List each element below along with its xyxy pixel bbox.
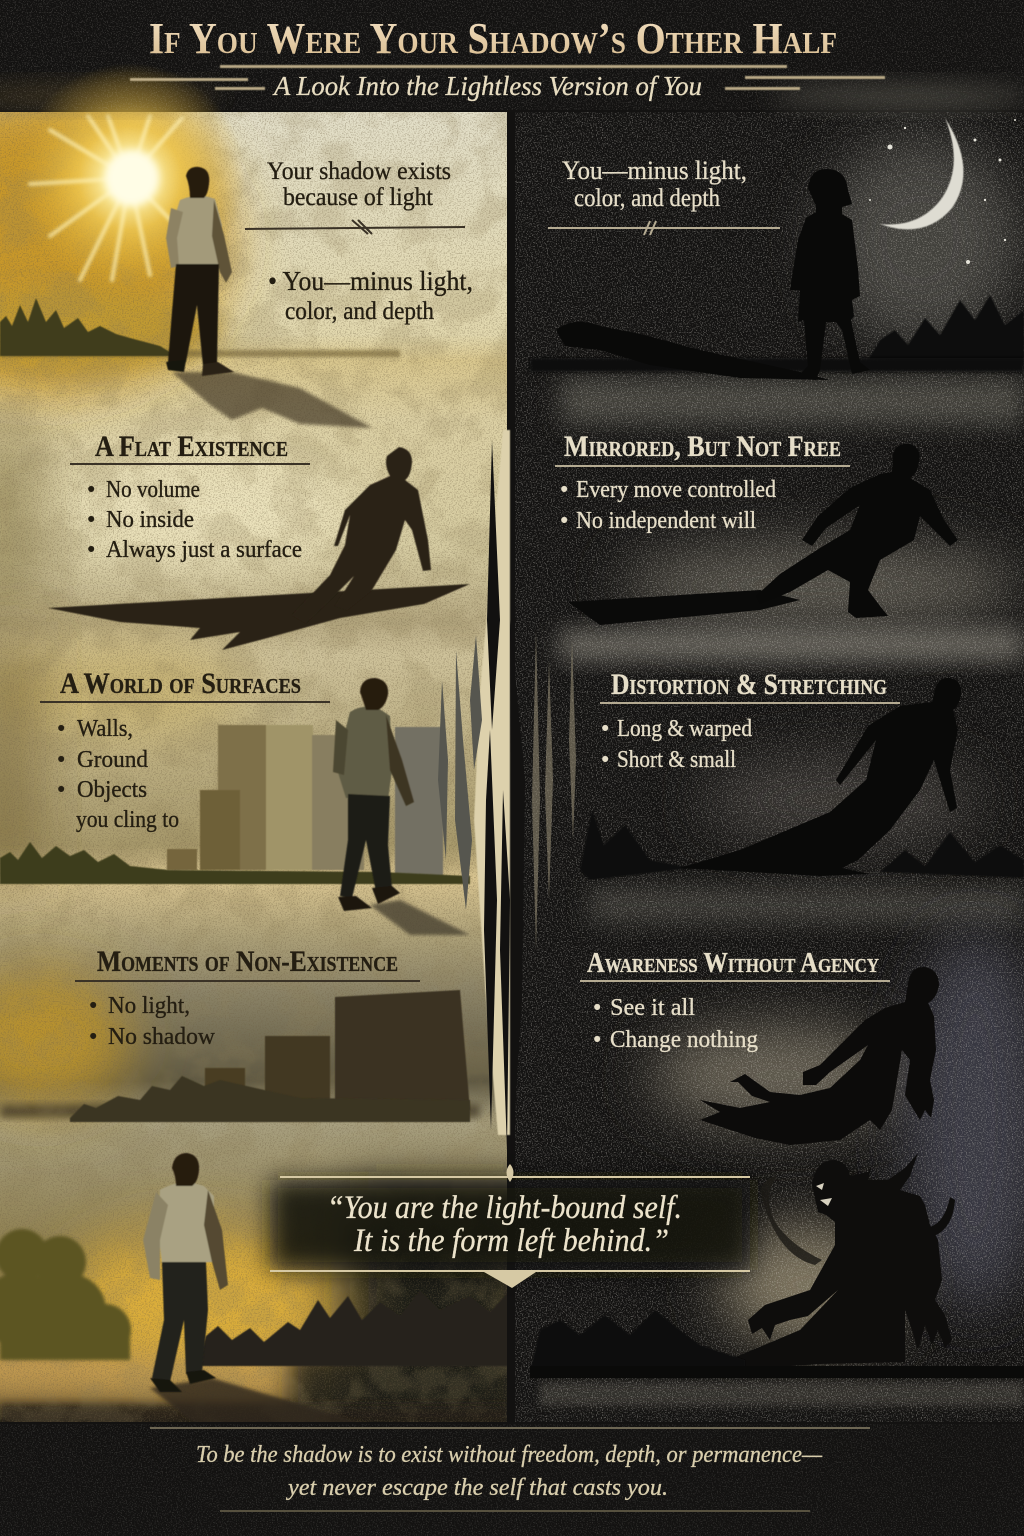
footer: To be the shadow is to exist without freedom, depth, or permanence— — [196, 1442, 823, 1468]
text block: a world of surfaces: Walls, — [77, 716, 133, 742]
panel: scene 2 light, flat existence — [48, 447, 470, 650]
text block: distortion and stretching: Distortion & Stretching — [611, 668, 887, 701]
figure: stretched silhouette with shadow — [680, 678, 961, 876]
text block: a world of surfaces: • — [57, 777, 65, 803]
panel: scene 4 dark, dissolving figure — [530, 967, 1024, 1378]
panel: scene 1 dark, moon and woman — [530, 118, 1024, 380]
text block: moments of non-existence: Moments of Non-Existence — [97, 945, 398, 978]
text block: moments of non-existence — [75, 945, 420, 1050]
text block: shadow exists — [245, 158, 473, 325]
text block: a flat existence: • — [87, 537, 95, 563]
text block: awareness without agency: • — [593, 995, 601, 1021]
figure: lunging silhouette — [756, 444, 958, 618]
panel: scene 3 light, world of surfaces — [0, 678, 470, 935]
cast shadow — [370, 900, 470, 935]
callout: quote — [270, 1164, 750, 1288]
cast shadow — [48, 584, 470, 650]
cast shadow — [556, 322, 830, 380]
text block: mirrored but not free: • — [560, 477, 568, 503]
treeline — [580, 810, 690, 880]
text block: awareness without agency: See it all — [610, 995, 695, 1021]
title: If You Were Your Shadow’s Other Half — [149, 14, 837, 63]
text block: distortion and stretching: • — [601, 716, 609, 742]
text block: a flat existence: No inside — [106, 507, 194, 533]
text block: mirrored but not free — [555, 430, 850, 534]
figure: dissolving silhouette — [700, 967, 939, 1145]
torn centre divider — [438, 112, 576, 1422]
buildings — [205, 990, 470, 1110]
text block: shadow exists: • You—minus light, — [268, 266, 473, 296]
figure: woman silhouette — [790, 169, 870, 380]
text block: mirrored but not free: • — [560, 508, 568, 534]
text block: moments of non-existence: • — [89, 993, 97, 1019]
icon: sun — [15, 63, 245, 293]
text block: moments of non-existence: No shadow — [108, 1024, 216, 1050]
text block: shadow exists: Your shadow exists — [267, 158, 451, 185]
text block: you minus light — [548, 156, 780, 235]
figure: man looking at sun — [166, 167, 234, 376]
cast shadow — [568, 590, 800, 625]
figure: walking man — [333, 678, 414, 911]
text block: shadow exists: color, and depth — [285, 298, 434, 325]
panel: scene 4 light, non-existence — [70, 990, 470, 1122]
ground line — [530, 1366, 1024, 1378]
text block: a world of surfaces: • — [57, 747, 65, 773]
subtitle: A Look Into the Lightless Version of You — [272, 71, 702, 101]
text block: you minus light: You—minus light, — [562, 156, 747, 185]
ground line — [530, 358, 1024, 372]
panel: scene 2 dark, mirrored figure — [568, 444, 958, 625]
panel: scene 3 dark, stretched figure — [580, 678, 1024, 880]
text block: shadow exists: because of light — [283, 184, 433, 211]
text block: distortion and stretching — [600, 668, 900, 773]
cast shadow of man — [172, 372, 372, 428]
text block: a flat existence: No volume — [106, 477, 200, 503]
callout: quote: “You are the light-bound self. — [327, 1190, 682, 1226]
tree bush — [0, 1229, 131, 1360]
text block: a world of surfaces: Objects — [77, 777, 147, 803]
text block: a world of surfaces: Ground — [77, 747, 148, 773]
panel: bottom light scene — [0, 1153, 510, 1428]
stars — [869, 119, 1016, 264]
buildings — [167, 725, 443, 877]
treeline — [70, 1076, 470, 1122]
figure: man walking away — [143, 1153, 228, 1392]
text block: a flat existence: Always just a surface — [106, 537, 302, 563]
text block: a world of surfaces: you cling to — [76, 807, 179, 833]
treeline — [530, 1310, 745, 1374]
text block: distortion and stretching: • — [601, 747, 609, 773]
text block: a flat existence: A Flat Existence — [95, 430, 288, 463]
text block: awareness without agency — [580, 947, 890, 1053]
icon: crescent moon — [880, 118, 963, 229]
text block: awareness without agency: Awareness Without Agency — [587, 947, 879, 979]
text block: a world of surfaces: A World of Surfaces — [60, 667, 301, 700]
panel: dark side background — [510, 112, 1024, 1422]
text block: awareness without agency: Change nothing — [610, 1027, 758, 1053]
footer — [0, 1422, 1024, 1536]
text block: moments of non-existence: No light, — [108, 993, 190, 1019]
text block: awareness without agency: • — [593, 1027, 601, 1053]
text block: mirrored but not free: Every move controlled — [576, 477, 776, 503]
text block: mirrored but not free: Mirrored, But Not Free — [564, 430, 841, 463]
figure: shadow monster — [700, 1153, 955, 1372]
text block: a world of surfaces — [40, 667, 330, 833]
text block: distortion and stretching: Short & small — [617, 747, 736, 773]
figure: leaning man — [292, 447, 431, 623]
panel: scene 1 light, sun and treeline — [0, 63, 372, 428]
footer: yet never escape the self that casts you. — [286, 1475, 668, 1501]
text block: mirrored but not free: No independent will — [576, 508, 756, 534]
text block: a flat existence: • — [87, 477, 95, 503]
treeline — [0, 842, 470, 884]
text block: moments of non-existence: • — [89, 1024, 97, 1050]
text block: a flat existence — [70, 430, 310, 563]
text block: distortion and stretching: Long & warped — [617, 716, 752, 742]
panel: light side background — [0, 90, 530, 1430]
text block: you minus light: color, and depth — [574, 185, 720, 212]
treeline distant — [200, 1290, 510, 1366]
treeline — [868, 295, 1024, 364]
text block: a flat existence: • — [87, 507, 95, 533]
debris swirl — [760, 1175, 822, 1265]
title rules — [130, 65, 885, 90]
callout: quote: It is the form left behind.” — [353, 1223, 669, 1259]
text block: a world of surfaces: • — [57, 716, 65, 742]
treeline left — [0, 298, 176, 356]
top band and title — [0, 0, 1024, 110]
cast shadow — [150, 1378, 380, 1428]
